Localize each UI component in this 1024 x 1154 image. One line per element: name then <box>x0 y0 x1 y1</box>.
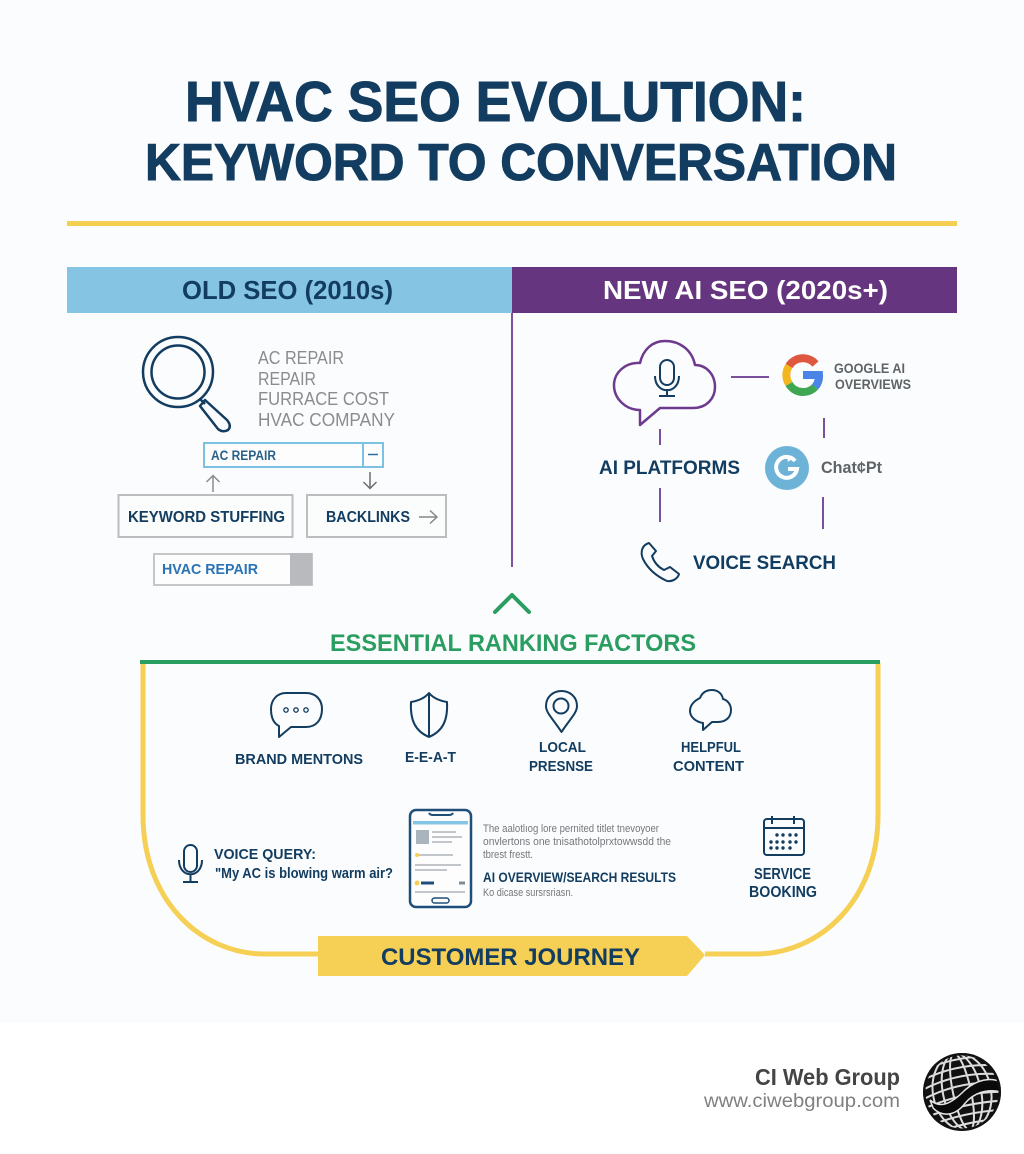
factor: E-E-A-T <box>405 693 456 766</box>
label: Google AI Overviews: OVERVIEWS <box>835 376 911 392</box>
keyword list: FURRACE COST <box>258 389 389 409</box>
label: Google AI Overviews: GOOGLE AI <box>834 360 905 376</box>
search box: AC repair <box>204 443 383 467</box>
header: old SEO <box>67 267 512 313</box>
heading: essential ranking factors: ESSENTIAL RANKING FACTORS <box>330 630 696 657</box>
icon: microphone <box>179 845 202 882</box>
label: AI platforms: AI PLATFORMS <box>599 457 740 479</box>
label: ChatGPT: Chat¢Pt <box>821 458 882 477</box>
icon: ChatGPT <box>765 446 809 490</box>
box: keyword stuffing: KEYWORD STUFFING <box>128 509 285 526</box>
text: voice query: "My AC is blowing warm air? <box>215 865 393 882</box>
box: backlinks: BACKLINKS <box>326 509 410 526</box>
icon: cloud with microphone <box>614 341 715 425</box>
keyword list: AC REPAIR <box>258 348 344 368</box>
factor: brand mentions <box>235 693 363 768</box>
factor: local presence <box>529 691 593 775</box>
arrow: green chevron <box>495 595 529 612</box>
banner: customer journey: CUSTOMER JOURNEY <box>381 944 640 971</box>
keyword list: REPAIR <box>258 369 316 389</box>
panel frame: customer journey loop <box>143 663 878 954</box>
icon: phone with search results <box>410 810 471 907</box>
label: service booking: BOOKING <box>749 884 817 901</box>
panel: ranking factors <box>235 690 744 775</box>
title <box>145 70 897 192</box>
factor: helpful content: HELPFUL <box>681 739 741 756</box>
panel: new AI SEO <box>599 341 911 581</box>
factor: E-E-A-T: E-E-A-T <box>405 749 456 766</box>
icon: Google G <box>786 358 819 392</box>
factor: local presence: LOCAL <box>539 739 586 756</box>
label: service booking: SERVICE <box>754 866 811 883</box>
icon: magnifying glass <box>143 337 230 431</box>
label: service booking <box>749 866 817 901</box>
title: HVAC SEO EVOLUTION: <box>185 70 806 134</box>
footer brand text: CI Web Group <box>755 1064 900 1090</box>
panel: old SEO <box>118 337 446 585</box>
factor: helpful content: CONTENT <box>673 758 744 775</box>
text: caption: Ko dicase sursrsriasn. <box>483 887 573 899</box>
text: search result description: tbrest frestt. <box>483 849 533 861</box>
keyword list: HVAC COMPANY <box>258 410 395 430</box>
footer brand text <box>703 1064 900 1112</box>
text: search result description: onvlertons one tnisathotolprxtowwsdd the <box>483 836 671 848</box>
search box: HVAC repair: HVAC REPAIR <box>162 561 258 578</box>
factor: brand mentions: BRAND MENTONS <box>235 751 363 768</box>
keyword list <box>258 348 395 430</box>
label: voice search: VOICE SEARCH <box>693 552 836 574</box>
text: voice query <box>214 846 393 882</box>
footer brand text: www.ciwebgroup.com <box>703 1090 900 1112</box>
header: new AI SEO <box>512 267 957 313</box>
header: new AI SEO: NEW AI SEO (2020s+) <box>603 275 888 305</box>
banner: customer journey <box>318 936 705 976</box>
box: backlinks <box>307 495 446 537</box>
arrow: up <box>206 476 220 492</box>
icon: calendar <box>764 816 804 855</box>
search box: AC repair: AC REPAIR <box>211 448 276 463</box>
header: old SEO: OLD SEO (2010s) <box>182 275 393 305</box>
panel: customer journey steps <box>179 810 817 907</box>
text: search result description: The aalotlıog lore pernited titlet tnevoyoer <box>483 823 659 835</box>
title: KEYWORD TO CONVERSATION <box>145 134 897 192</box>
factor: helpful content <box>673 690 744 775</box>
search box: HVAC repair <box>154 553 312 585</box>
arrow: down <box>364 472 376 488</box>
box: keyword stuffing <box>118 495 292 537</box>
icon: phone <box>642 543 679 581</box>
text: AI overview heading: AI OVERVIEW/SEARCH RESULTS <box>483 869 676 885</box>
connector lines <box>660 377 824 529</box>
label: Google AI Overviews <box>834 360 911 392</box>
factor: local presence: PRESNSE <box>529 758 593 775</box>
text: search result description <box>483 823 671 861</box>
text: voice query: VOICE QUERY: <box>214 846 316 863</box>
icon: globe logo <box>923 1053 1001 1131</box>
